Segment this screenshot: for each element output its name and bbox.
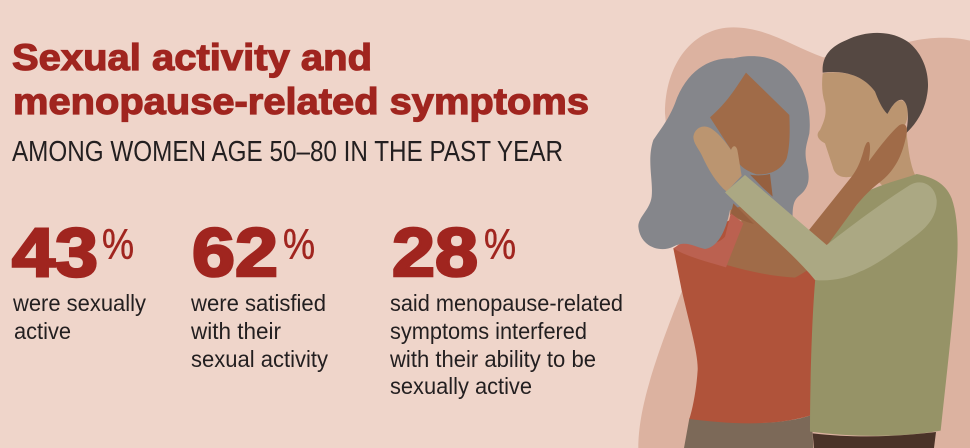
man's sleeve: [725, 175, 937, 280]
stat: 43 percent: 43: [12, 214, 98, 291]
stat: 43 percent: active: [14, 318, 71, 344]
woman's neck: [730, 180, 773, 223]
woman's trousers: [684, 415, 813, 448]
man's neck: [863, 133, 915, 187]
stat: 62 percent: sexual activity: [191, 346, 328, 372]
stat: 62 percent: with their: [190, 318, 281, 344]
man's hand: [693, 127, 742, 192]
man's hair: [823, 33, 928, 133]
stat: 43 percent: %: [102, 221, 134, 269]
title: menopause-related symptoms: [13, 80, 589, 122]
subtitle: AMONG WOMEN AGE 50–80 IN THE PAST YEAR: [12, 136, 563, 168]
woman's neck shading: [731, 174, 773, 224]
stat: 28 percent: sexually active: [390, 373, 532, 399]
woman's face: [710, 73, 790, 174]
stat: 28 percent: said menopause-related: [390, 290, 623, 316]
stat: 28 percent: %: [484, 221, 516, 269]
woman's forearm and hand: [809, 124, 907, 246]
man's shirt: [810, 174, 958, 436]
woman's chest: [727, 207, 827, 278]
woman's top: [673, 220, 820, 423]
illustration: embracing couple: [638, 27, 970, 448]
stat: 28 percent: [389, 214, 623, 399]
stat: 28 percent: 28: [392, 214, 478, 291]
man's face: [818, 72, 908, 177]
stat: 28 percent: with their ability to be: [389, 346, 596, 372]
stat: 28 percent: symptoms interfered: [390, 318, 587, 344]
title: Sexual activity and: [12, 36, 372, 78]
stat: 62 percent: [190, 214, 328, 372]
stat: 43 percent: were sexually: [12, 290, 146, 316]
stat: 62 percent: %: [283, 221, 315, 269]
stat: 43 percent: [12, 214, 146, 344]
stat: 62 percent: were satisfied: [190, 290, 326, 316]
title: [12, 36, 589, 122]
woman's collar: [673, 213, 743, 267]
stat: 62 percent: 62: [192, 214, 278, 291]
man's trousers: [813, 432, 936, 448]
woman's hair: [638, 56, 810, 249]
background blob: [638, 27, 970, 448]
